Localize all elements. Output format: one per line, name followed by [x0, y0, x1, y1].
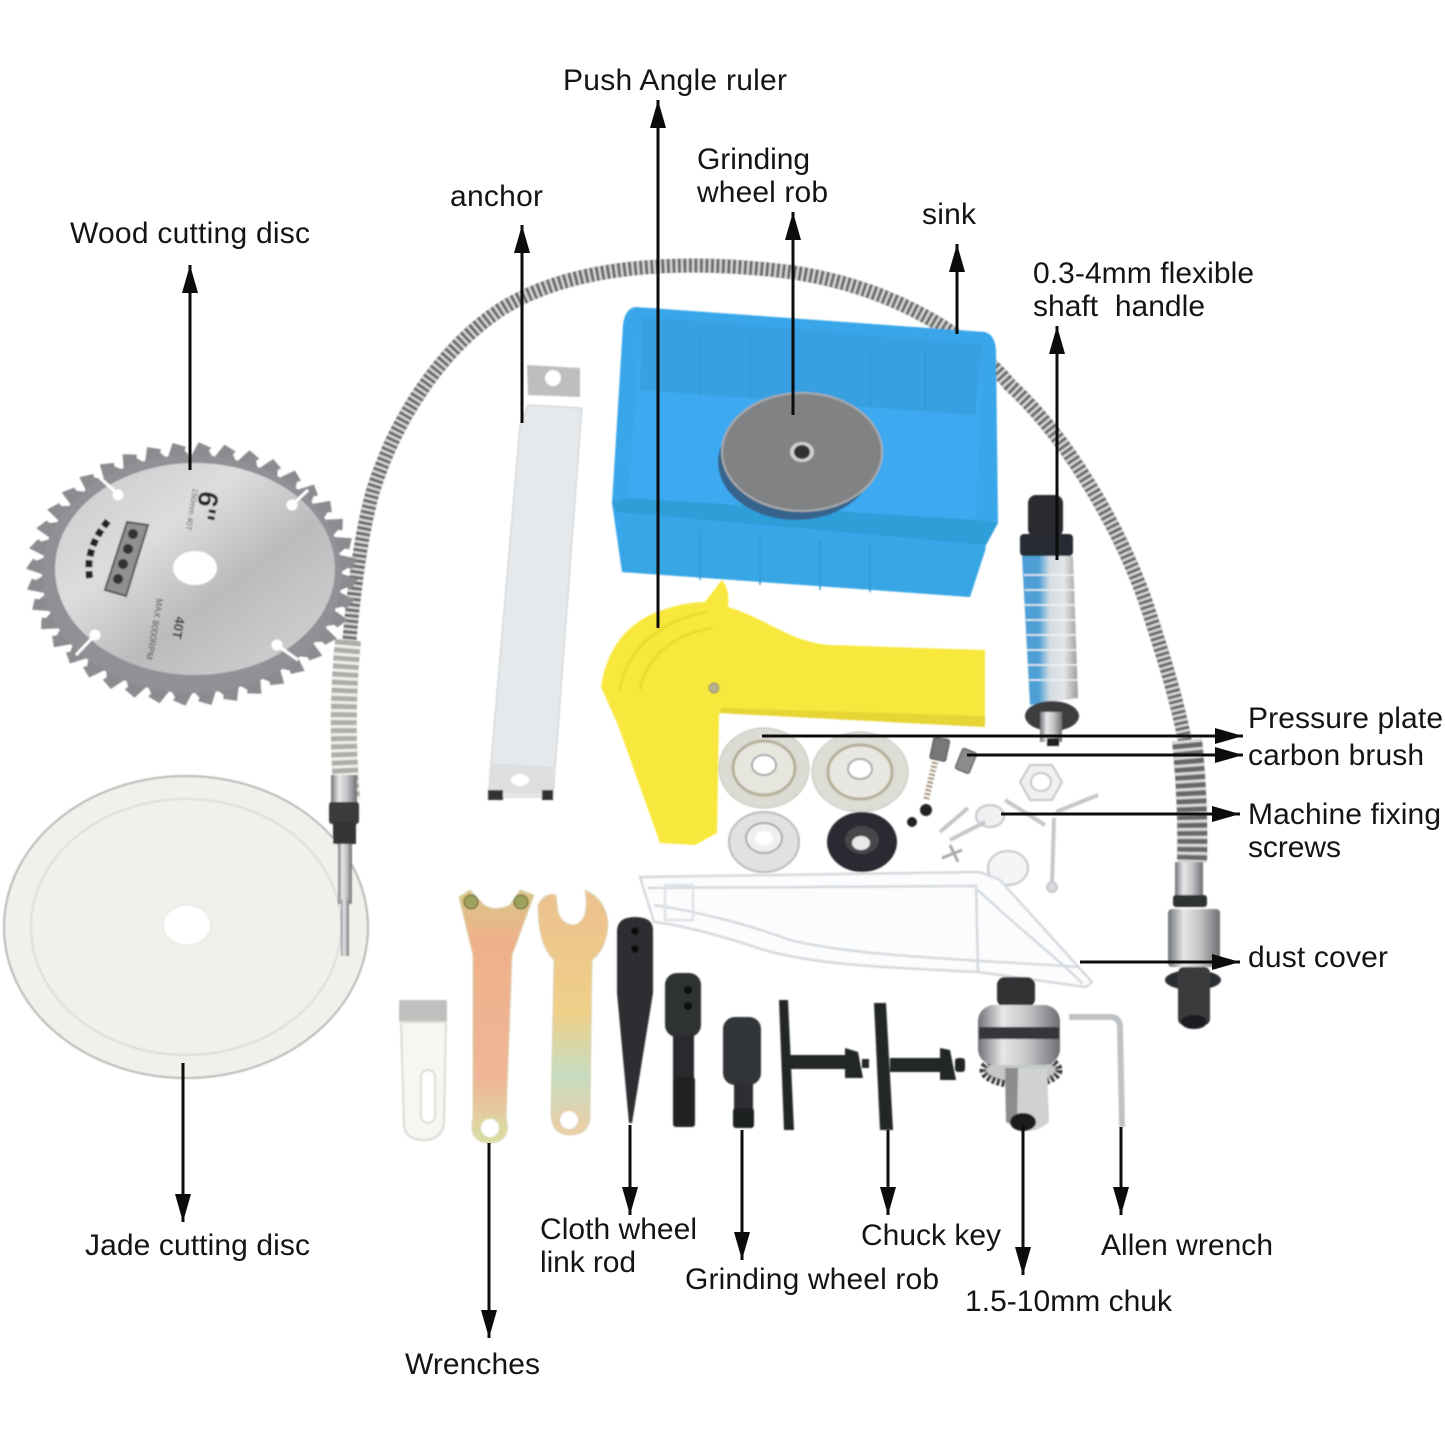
callout labels: Wrenches [405, 1348, 540, 1381]
flange nut [729, 812, 799, 872]
wood cutting disc: saw blade [15, 433, 369, 715]
cloth wheel link rod [617, 917, 653, 1123]
callout labels: anchor [450, 180, 543, 213]
anchor bracket [488, 365, 582, 800]
chuck key two [874, 1003, 965, 1130]
callout labels: Cloth wheel [540, 1213, 697, 1246]
grinding wheel disc [718, 393, 882, 520]
chuck key one [779, 1000, 869, 1130]
grinding wheel rod [723, 1017, 761, 1128]
blade logo strip [105, 522, 148, 596]
blade direction arrow [89, 521, 108, 580]
flexible shaft [344, 266, 1192, 862]
callout labels: Jade cutting disc [85, 1229, 310, 1262]
flexible shaft handle [1020, 495, 1079, 746]
product photo: parts [4, 266, 1221, 1143]
callout labels: wheel rob [696, 176, 828, 209]
callout labels: Grinding [697, 143, 810, 176]
callout labels: dust cover [1248, 941, 1388, 974]
callout labels: Wood cutting disc [70, 217, 310, 250]
left shaft tip [329, 775, 359, 956]
blade rating print: MAX 8000RPM [144, 598, 165, 660]
wrench with pins [459, 890, 534, 1143]
callout labels: Machine fixing [1248, 798, 1441, 831]
blade size print: 6'' [189, 489, 225, 523]
allen wrench [1069, 1017, 1122, 1127]
1.5-10mm chuck [978, 977, 1060, 1131]
callout labels: carbon brush [1248, 739, 1424, 772]
callout labels: Push Angle ruler [563, 64, 787, 97]
callout labels: sink [922, 198, 977, 231]
blade tooth count: 40T [169, 615, 188, 640]
callout labels: Grinding wheel rob [685, 1263, 939, 1296]
callout labels: link rod [540, 1246, 636, 1279]
callout labels: 1.5-10mm chuk [965, 1285, 1173, 1318]
saw teeth [15, 433, 369, 715]
callout labels: Allen wrench [1101, 1229, 1273, 1262]
callout labels: 0.3-4mm flexible [1033, 257, 1254, 290]
push angle ruler [601, 580, 985, 845]
small mounting bracket [399, 1000, 447, 1140]
callout arrows [183, 100, 1243, 1338]
right shaft end [1165, 862, 1221, 1029]
dust cover [640, 872, 1092, 987]
sink: blue tray [612, 307, 998, 597]
carbon brushes [907, 737, 977, 827]
callout labels: screws [1248, 831, 1341, 864]
open-end wrench [538, 890, 608, 1135]
blade small print: 150mm 40T [184, 488, 200, 531]
pressure plate washers [719, 728, 908, 812]
threaded link rod [665, 973, 701, 1127]
black flange [827, 812, 897, 872]
machine fixing screws [940, 765, 1098, 892]
callout labels: Pressure plate [1248, 702, 1443, 735]
callout labels: Chuck key [861, 1219, 1001, 1252]
callout labels: shaft handle [1033, 290, 1205, 323]
jade cutting disc [4, 776, 368, 1078]
expansion slots [76, 478, 308, 660]
